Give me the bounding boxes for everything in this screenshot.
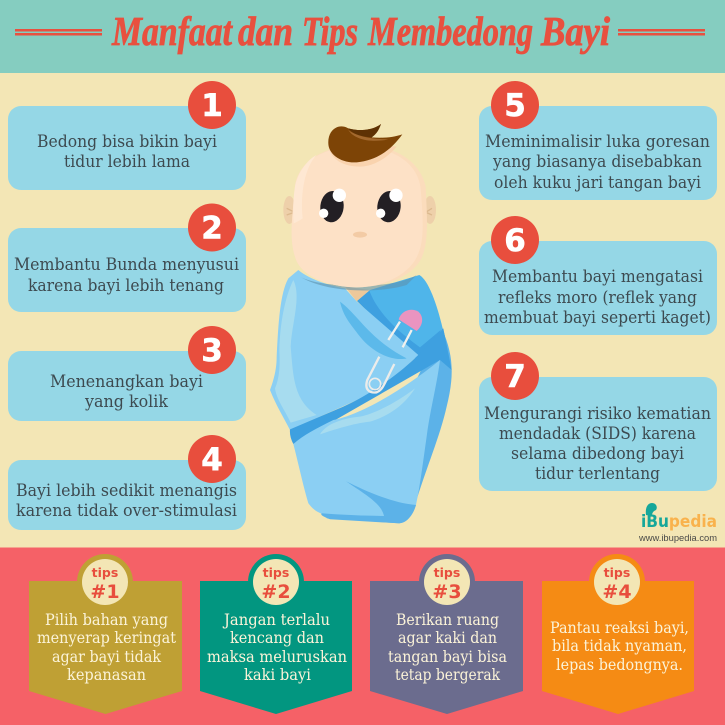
baby body wrap <box>270 270 452 523</box>
benefit 4: Bayi lebih sedikit menangis <box>16 481 237 501</box>
benefit 5: 5 <box>504 88 526 124</box>
tip 4: bila tidak nyaman, <box>552 637 687 655</box>
tip 2 <box>200 554 352 714</box>
benefit 7: tidur terlentang <box>535 464 660 484</box>
benefit 1 <box>8 81 246 190</box>
tip 3: tangan bayi bisa <box>388 648 507 666</box>
title: Membedong <box>367 8 533 54</box>
benefit 6: Membantu bayi mengatasi <box>492 267 704 287</box>
tip 3: agar kaki dan <box>398 629 497 647</box>
benefit 6 <box>479 216 717 335</box>
header band <box>0 0 725 73</box>
benefit 7: mendadak (SIDS) karena <box>499 424 696 444</box>
benefit 7 <box>479 352 717 491</box>
tip 1: kepanasan <box>67 666 146 684</box>
benefit 5: oleh kuku jari tangan bayi <box>494 173 702 193</box>
tip 1 <box>29 554 182 714</box>
tip 2: maksa meluruskan <box>207 648 347 666</box>
benefit 6: membuat bayi seperti kaget) <box>484 308 711 328</box>
title: Manfaat <box>111 8 233 54</box>
tip 2: Jangan terlalu <box>222 611 330 629</box>
tip 4: tips <box>604 565 630 580</box>
tip 1: menyerap keringat <box>37 629 177 647</box>
logo: iBupedia: iBupedia <box>641 512 717 532</box>
benefit 6: refleks moro (reflek yang <box>498 288 697 308</box>
tip 1: agar bayi tidak <box>52 648 162 666</box>
benefit 2: 2 <box>201 210 223 246</box>
benefit 1: 1 <box>201 88 223 124</box>
title: Bayi <box>540 8 611 54</box>
benefit 4: karena tidak over-stimulasi <box>16 501 238 521</box>
tip 4: lepas bedongnya. <box>556 656 683 674</box>
tips band <box>0 548 725 725</box>
benefit 5 <box>479 81 717 200</box>
benefit 5: Meminimalisir luka goresan <box>485 132 710 152</box>
benefit 3: yang kolik <box>84 392 169 412</box>
benefit 7: selama dibedong bayi <box>511 444 685 464</box>
tip 3: tips <box>434 565 460 580</box>
title: Tips <box>302 8 358 54</box>
tip 1: Pilih bahan yang <box>45 611 168 629</box>
safety pin <box>366 310 422 392</box>
title <box>111 8 611 54</box>
benefit 2: Membantu Bunda menyusui <box>14 255 240 275</box>
benefit 2 <box>8 204 246 312</box>
tip 1: #1 <box>90 581 120 603</box>
tip 3: tetap bergerak <box>395 666 501 684</box>
tip 2: kencang dan <box>230 629 324 647</box>
benefit 7: Mengurangi risiko kematian <box>484 404 711 424</box>
title: dan <box>238 8 293 54</box>
benefit 5: yang biasanya disebabkan <box>492 152 702 172</box>
benefit 4 <box>8 435 246 530</box>
tip 4 <box>542 554 694 714</box>
tip 2: tips <box>263 565 289 580</box>
tip 4: Pantau reaksi bayi, <box>550 619 689 637</box>
benefit 3 <box>8 326 246 421</box>
tip 3 <box>370 554 523 714</box>
swaddled baby illustration <box>270 124 452 523</box>
tip 1: tips <box>92 565 118 580</box>
logo: iBupedia: www.ibupedia.com <box>638 533 717 544</box>
benefit 4: 4 <box>201 442 223 478</box>
tip 3: #3 <box>432 581 462 603</box>
benefit 1: tidur lebih lama <box>64 152 190 172</box>
benefit 1: Bedong bisa bikin bayi <box>37 132 218 152</box>
benefit 7: 7 <box>504 359 526 395</box>
logo: iBupedia <box>638 503 717 544</box>
benefit 3: Menenangkan bayi <box>50 372 204 392</box>
tip 3: Berikan ruang <box>396 611 499 629</box>
baby head <box>283 124 436 290</box>
benefit 6: 6 <box>504 223 526 259</box>
tip 2: kaki bayi <box>244 666 311 684</box>
benefit 3: 3 <box>201 333 223 369</box>
benefit 2: karena bayi lebih tenang <box>28 276 224 296</box>
tip 4: #4 <box>602 581 632 603</box>
tip 2: #2 <box>261 581 291 603</box>
